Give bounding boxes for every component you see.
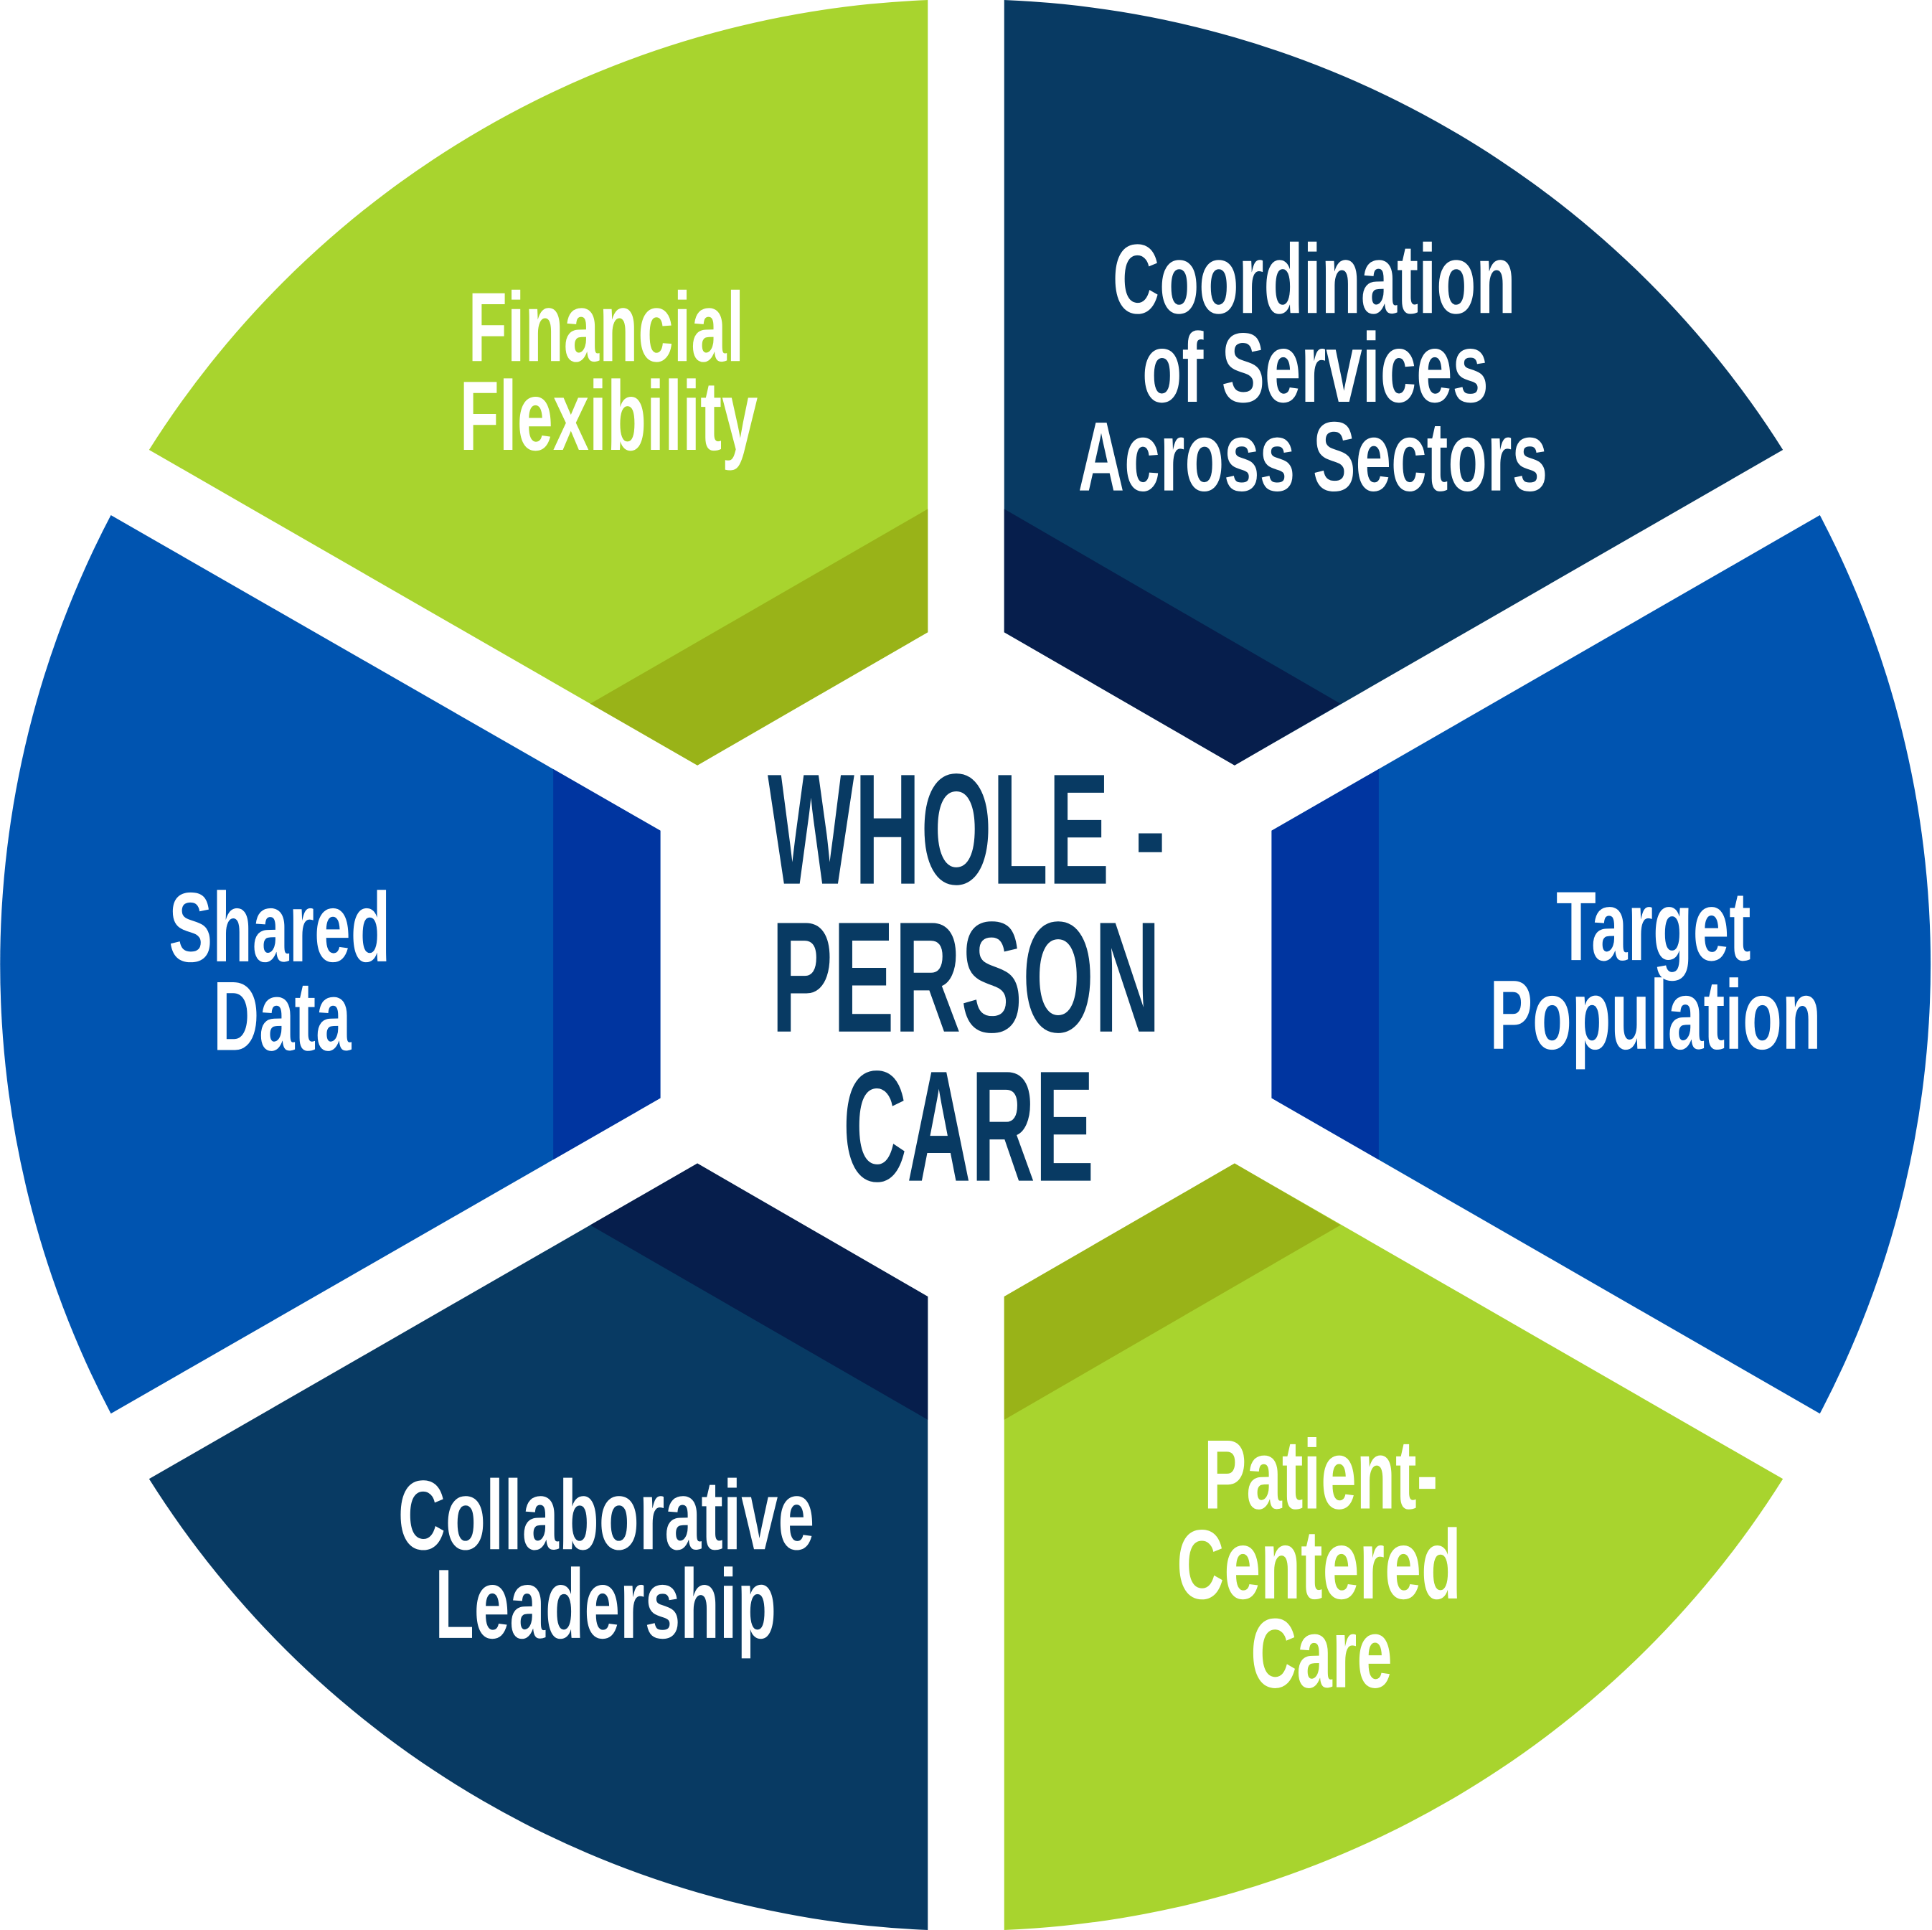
- segment: Collaborative Leadership: [149, 1164, 928, 1930]
- center title: WHOLE -: [768, 741, 1166, 918]
- center title: [768, 741, 1166, 1215]
- segment: Collaborative Leadership: Leadership: [435, 1550, 776, 1660]
- segment: Coordination of Services Across Sectors: Across Sectors: [1078, 403, 1547, 512]
- segment: Patient-Centered Care: Patient-: [1204, 1421, 1438, 1530]
- segment: Financial Flexibility: Flexibility: [460, 362, 758, 471]
- segment: Patient-Centered Care: Centered: [1177, 1510, 1461, 1620]
- segment: Target Population: [1271, 515, 1931, 1413]
- segment: Shared Data: Shared: [169, 873, 390, 983]
- segment: Financial Flexibility: Financial: [468, 273, 744, 382]
- segment: Shared Data: [0, 515, 661, 1413]
- segment: Coordination of Services Across Sectors: Coordination: [1113, 225, 1515, 334]
- segment: Patient-Centered Care: [1004, 1164, 1783, 1930]
- segment: Shared Data: Data: [213, 962, 352, 1072]
- segment: Coordination of Services Across Sectors: [1004, 0, 1783, 766]
- segment: Coordination of Services Across Sectors: of Services: [1142, 314, 1489, 423]
- segment: Patient-Centered Care: Care: [1250, 1599, 1393, 1709]
- segment: Financial Flexibility: [149, 0, 928, 766]
- center title: CARE: [843, 1038, 1094, 1215]
- segment: Target Population: Target: [1556, 872, 1751, 982]
- center title: PERSON: [771, 889, 1161, 1065]
- segment: Collaborative Leadership: Collaborative: [398, 1461, 814, 1571]
